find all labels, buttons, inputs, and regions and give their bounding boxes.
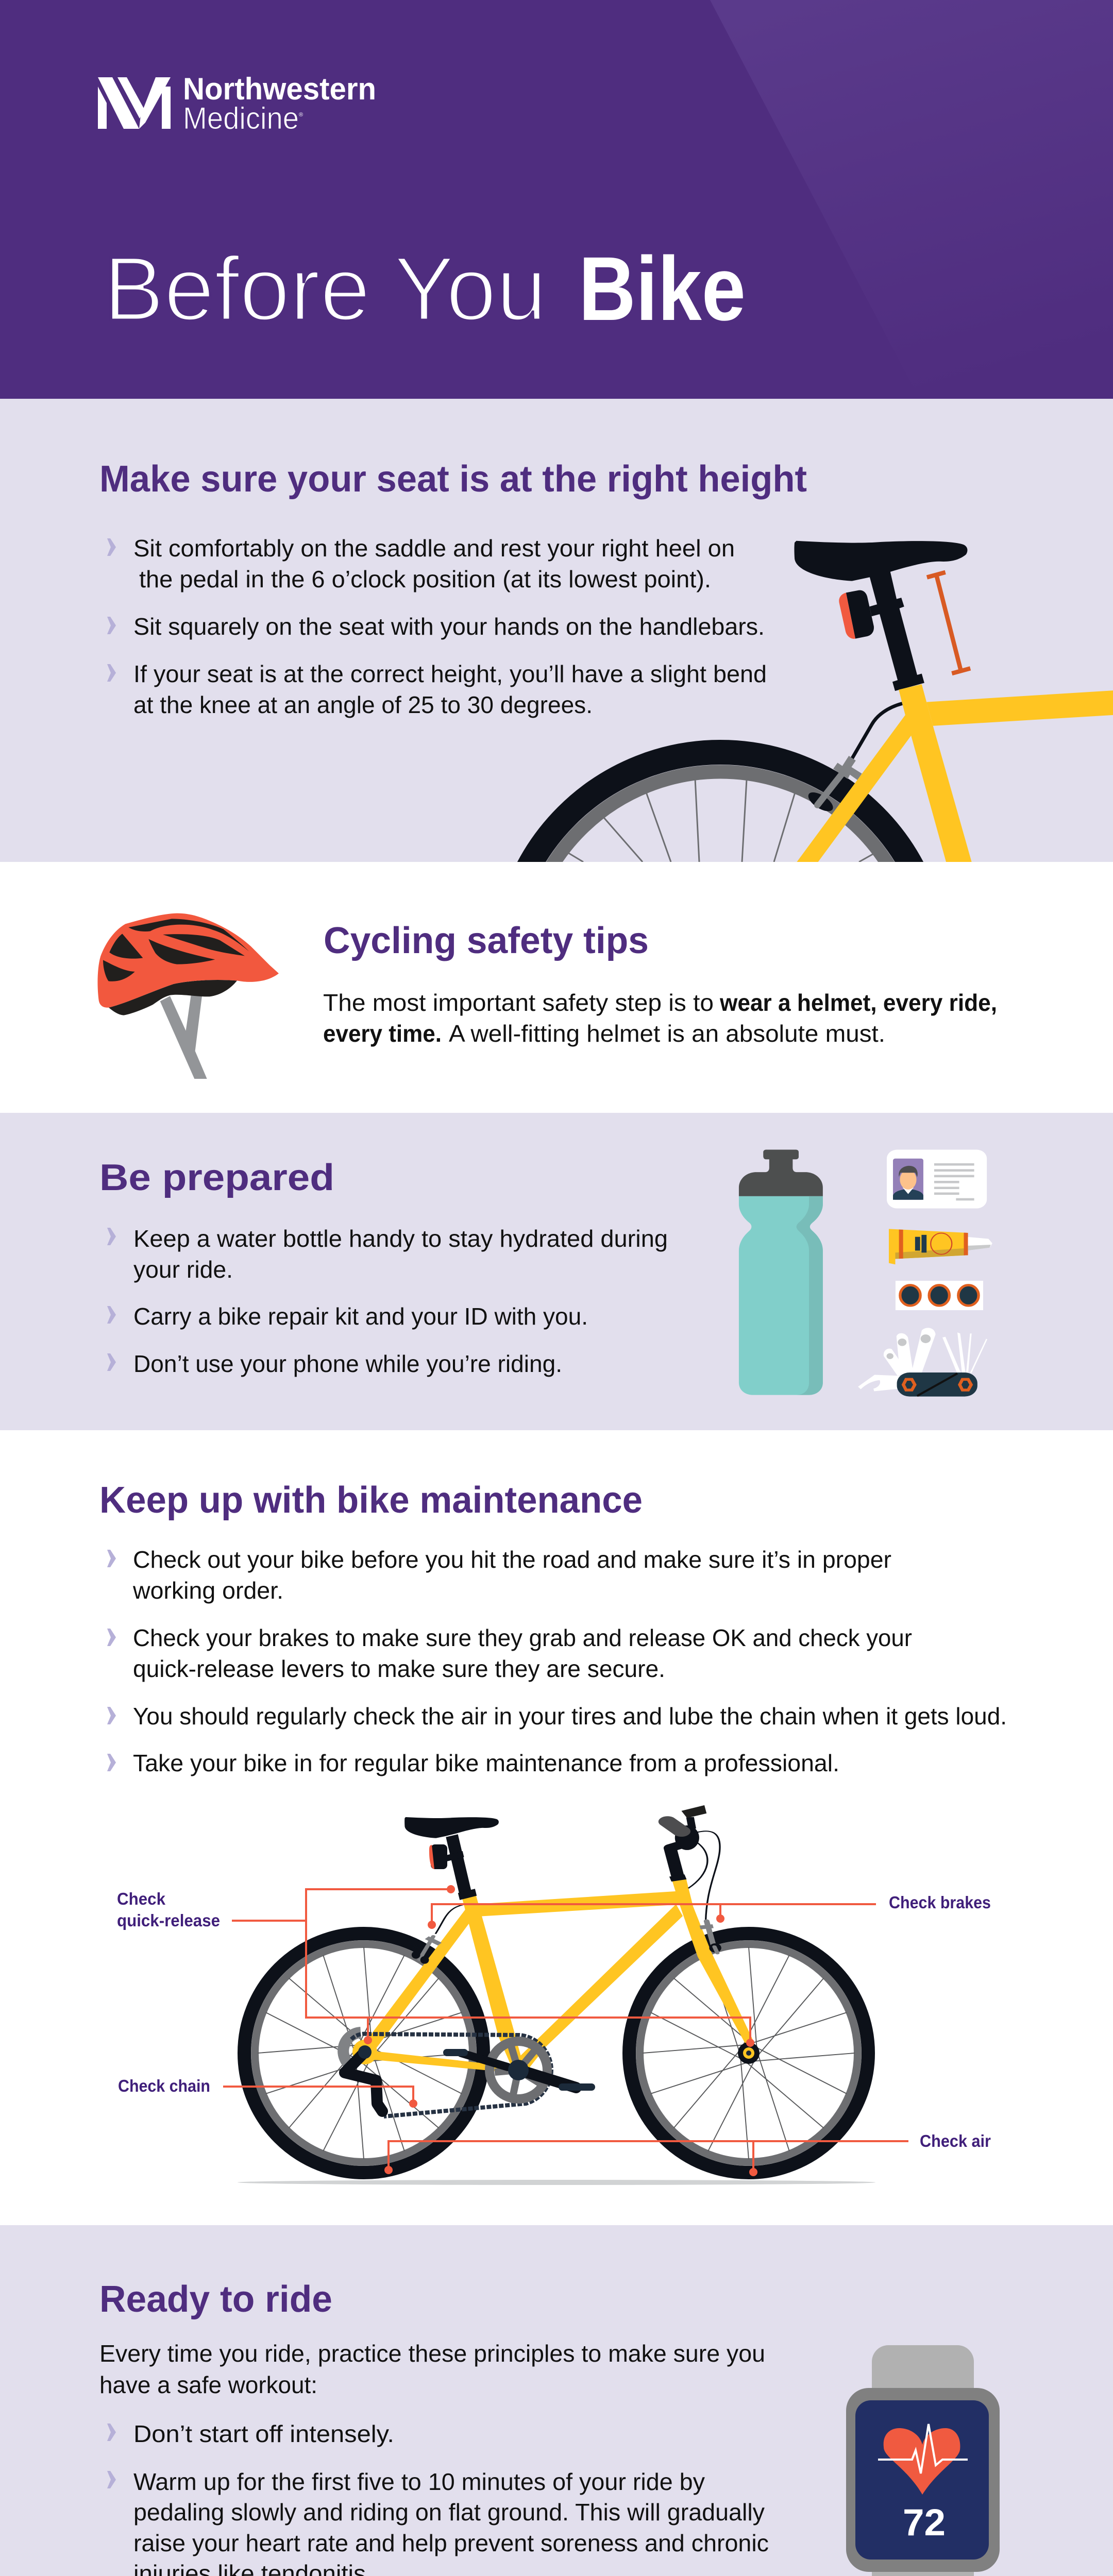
rear wheel [244,1934,483,2173]
bullet list: workout principles: Don’t start off intensely. [133,2420,394,2447]
panel: seat height [0,399,1113,1187]
text: helmet advice: The most important safety step is to [323,989,714,1016]
heading: seat height: Make sure your seat is at the right height [99,459,807,500]
logo: Northwestern Medicine [98,72,376,135]
bullet list: workout principles: raise your heart rate and help prevent soreness and chronic [133,2530,769,2556]
illustration: bike seat and frame close-up [503,541,1113,1187]
callout: check air: Check air [920,2131,991,2150]
pulse line [878,2424,968,2473]
heading: cycling safety tips: Cycling safety tips [324,920,649,961]
front wheel [629,1934,868,2173]
heart rate symbol [884,2428,960,2495]
bullet list: be prepared: your ride. [133,1256,233,1283]
panel: bike maintenance [99,1480,1007,2185]
ground shadow [238,2180,875,2185]
saddle and seat post [404,1817,499,1900]
logo: Northwestern Medicine: Medicine [183,101,299,135]
bullet list: bike maintenance: Take your bike in for regular bike maintenance from a professional. [133,1750,839,1776]
title: Bike [579,239,746,340]
bullet list: be prepared [107,1225,668,1377]
callout: check air [384,2131,991,2176]
bullet list: seat height: If your seat is at the correct height, you’ll have a slight bend [133,660,767,687]
bullet list: bike maintenance [107,1546,1007,1776]
callout: check quick-release: Check [117,1889,166,1908]
title: Before You [104,239,547,340]
text: helmet advice: wear a helmet, every ride, [719,989,997,1016]
bike frame [352,1877,752,2073]
diagram: bike with maintenance callouts [117,1805,991,2185]
bullet list: seat height [107,535,767,718]
bullet list: bike maintenance: Check out your bike before you hit the road and make sure it’s in proper [133,1546,891,1573]
heart rate number: 72 [903,2502,946,2544]
header banner [0,0,1113,399]
bullet list: seat height: the pedal in the 6 o’clock position (at its lowest point). [139,566,711,592]
icon: water bottle [739,1150,823,1395]
text: helmet advice: every time. [323,1020,442,1047]
callout: check chain [118,2076,417,2108]
icon: glue tube [889,1229,992,1264]
heading: ready to ride: Ready to ride [99,2279,332,2320]
bullet list: workout principles: Warm up for the first five to 10 minutes of your ride by [133,2468,705,2495]
bullet list: seat height: Sit comfortably on the saddle and rest your right heel on [133,535,735,562]
icon: tire patches [896,1281,983,1310]
bullet list: be prepared: Don’t use your phone while you’re riding. [133,1350,562,1377]
callout: check chain: Check chain [118,2076,210,2095]
bullet list: bike maintenance: working order. [132,1577,283,1604]
bullet list: seat height: at the knee at an angle of 25 to 30 degrees. [133,691,593,718]
logo: Northwestern Medicine: Northwestern [183,72,376,106]
intro text: have a safe workout: [99,2371,317,2398]
bullet list: seat height: Sit squarely on the seat with your hands on the handlebars. [133,613,765,640]
bullet list: bike maintenance: You should regularly check the air in your tires and lube the chain when it gets loud. [133,1703,1007,1730]
bullet list: bike maintenance: Check your brakes to make sure they grab and release OK and check your [133,1624,912,1651]
callout: check brakes [428,1893,991,1929]
intro text [99,2340,765,2398]
callout: check quick-release: quick-release [117,1911,220,1930]
title [104,239,746,340]
bullet list: bike maintenance: quick-release levers to make sure they are secure. [133,1655,665,1682]
intro text: Every time you ride, practice these principles to make sure you [99,2340,765,2367]
panel: ready to ride [0,2225,1113,2576]
icon: fitness watch [846,2345,1000,2576]
bullet list: workout principles [107,2420,779,2576]
logo: Northwestern Medicine: ® [299,112,303,118]
heading: be prepared: Be prepared [99,1157,334,1198]
icon: helmet [97,913,279,1079]
bullet list: be prepared: Keep a water bottle handy to stay hydrated during [133,1225,668,1252]
heading: bike maintenance: Keep up with bike maintenance [99,1480,643,1521]
callout: check quick-release [117,1885,754,2047]
bullet list: be prepared: Carry a bike repair kit and your ID with you. [133,1303,588,1330]
bullet list: workout principles: pedaling slowly and riding on flat ground. This will gradually [133,2499,765,2526]
callout: check brakes: Check brakes [889,1893,991,1912]
icon: multi-tool [858,1328,987,1397]
drivetrain [343,2032,760,2116]
icon: ID card [887,1150,987,1209]
panel: be prepared [0,1113,1113,1430]
text: helmet advice [323,989,997,1047]
panel: cycling safety tips [97,913,997,1079]
handlebars, brakes and cables [412,1805,721,1964]
text: helmet advice: A well-fitting helmet is an absolute must. [449,1020,885,1047]
